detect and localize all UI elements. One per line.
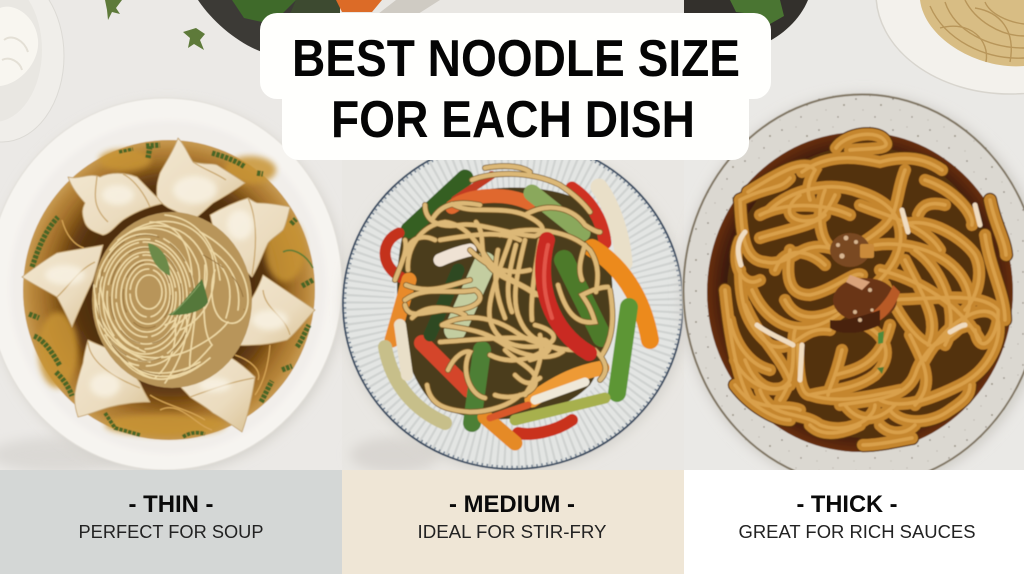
title: FOR EACH DISH [331, 91, 695, 149]
caption: thick [684, 470, 1024, 574]
dumpling highlights [45, 176, 288, 397]
dumplings [22, 138, 315, 432]
top-left side plate with rice [0, 0, 64, 142]
green onion ring [283, 250, 313, 268]
striped plate [342, 138, 684, 470]
food base [397, 188, 612, 419]
panel: thin noodle soup bowl [0, 98, 344, 473]
dark sauce [707, 132, 1013, 452]
herb garnish in the broth [29, 145, 313, 437]
plate shadow [682, 94, 1024, 490]
basil leaves on nest [148, 243, 208, 315]
caption: medium: IDEAL FOR STIR-FRY [418, 522, 606, 542]
caption: medium [342, 470, 684, 574]
speckled ceramic plate [682, 93, 1024, 487]
loose strands in the broth [62, 220, 270, 430]
noodle nest [92, 212, 252, 388]
thick noodles [725, 134, 1006, 445]
broth [23, 140, 315, 440]
dumpling folds [57, 162, 290, 397]
panel: medium noodle stir-fry plate [342, 138, 687, 473]
title: BEST NOODLE SIZE [292, 30, 740, 88]
vegetables lower layer [385, 175, 650, 443]
caption: medium: - MEDIUM - [449, 491, 575, 518]
caption: thin: - THIN - [128, 491, 214, 518]
red pepper on top of noodles [543, 240, 589, 353]
title [260, 13, 771, 160]
bowl shadow [0, 103, 344, 473]
caption: thick: GREAT FOR RICH SAUCES [738, 522, 976, 542]
top-right side plate with noodles [876, 0, 1024, 94]
top right dark dish with greens [684, 0, 808, 50]
noodle mound base [727, 146, 997, 438]
caption: thick: - THICK - [796, 491, 898, 518]
caption: thin: PERFECT FOR SOUP [78, 522, 264, 542]
panel: thick noodle plate with rich sauce [682, 93, 1024, 490]
pale noodle highlights [738, 205, 980, 380]
white bowl [0, 98, 342, 470]
caption panels [0, 470, 1024, 574]
meat topping [830, 233, 900, 374]
herb sprigs on tabletop [105, 0, 205, 50]
top centre dark dish with greens and carrot [198, 0, 440, 52]
plate shadow [343, 143, 687, 473]
medium noodles [395, 166, 612, 412]
caption: thin [0, 470, 342, 574]
